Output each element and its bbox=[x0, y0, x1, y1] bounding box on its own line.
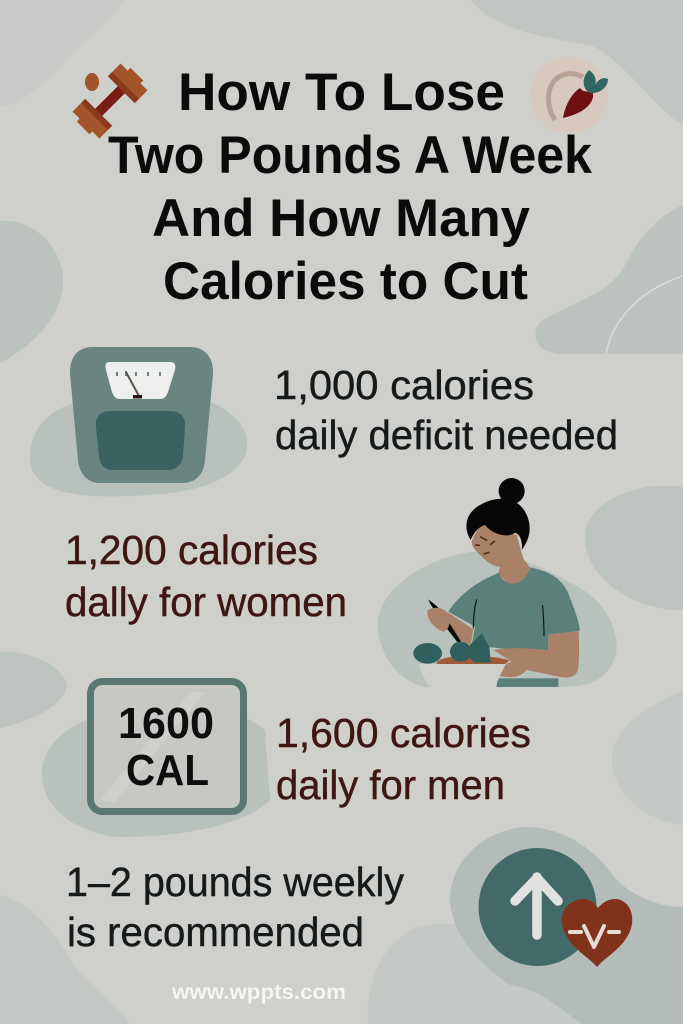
title: How To Lose bbox=[178, 63, 505, 122]
text: 1,000 calories: daily deficit needed bbox=[275, 412, 618, 458]
icon: calorie sign bbox=[90, 682, 244, 812]
text: 1,600 calories bbox=[276, 710, 531, 808]
panel: arrow and heart bbox=[450, 827, 683, 1024]
icon: calorie sign: CAL bbox=[126, 746, 209, 795]
text: 1,600 calories: daily for men bbox=[276, 762, 505, 808]
title bbox=[108, 63, 592, 311]
icon: bathroom scale bbox=[70, 347, 213, 483]
icon: heart bbox=[562, 899, 632, 967]
icon: calorie sign: 1600 bbox=[118, 699, 214, 748]
panel: woman cooking bbox=[378, 478, 617, 687]
calorie blob bbox=[42, 705, 270, 837]
food bbox=[437, 656, 509, 665]
neck bbox=[498, 542, 532, 590]
title: And How Many bbox=[152, 189, 531, 248]
face bbox=[472, 525, 520, 567]
scale blob bbox=[30, 400, 247, 496]
text: 1,600 calories: 1,600 calories bbox=[276, 710, 531, 756]
bowl bbox=[418, 664, 506, 687]
text: 1-2 pounds weekly bbox=[66, 859, 404, 955]
lower shirt bbox=[497, 678, 558, 687]
icon: dumbbell bbox=[70, 61, 150, 141]
icon: arrow circle bbox=[478, 848, 596, 966]
text: 1,000 calories: 1,000 calories bbox=[274, 362, 534, 408]
bottom blob bbox=[450, 827, 683, 1024]
website url: www.wppts.com bbox=[171, 981, 346, 1004]
icon: woman bbox=[413, 478, 580, 687]
title: Calories to Cut bbox=[163, 252, 528, 311]
text: 1,200 calories: 1,200 calories bbox=[65, 527, 318, 573]
right arm bbox=[493, 631, 579, 678]
panel: 1600 cal bbox=[42, 682, 270, 837]
icon: plate with carrot heart bbox=[530, 57, 608, 133]
shirt bbox=[448, 567, 580, 652]
text: 1,000 calories bbox=[274, 362, 618, 458]
woman blob bbox=[378, 552, 617, 687]
text: 1-2 pounds weekly: is recommended bbox=[67, 909, 364, 955]
face details bbox=[475, 537, 495, 554]
arm with spoon bbox=[447, 613, 473, 645]
text: 1-2 pounds weekly: 1–2 pounds weekly bbox=[66, 859, 404, 905]
panel: scale bbox=[30, 347, 247, 496]
white arc on right blob bbox=[606, 276, 683, 354]
text: 1,200 calories bbox=[65, 527, 347, 625]
text: 1,200 calories: dally for women bbox=[65, 579, 347, 625]
bun bbox=[499, 478, 525, 504]
title: Two Pounds A Week bbox=[108, 126, 592, 185]
hair bbox=[466, 499, 530, 550]
